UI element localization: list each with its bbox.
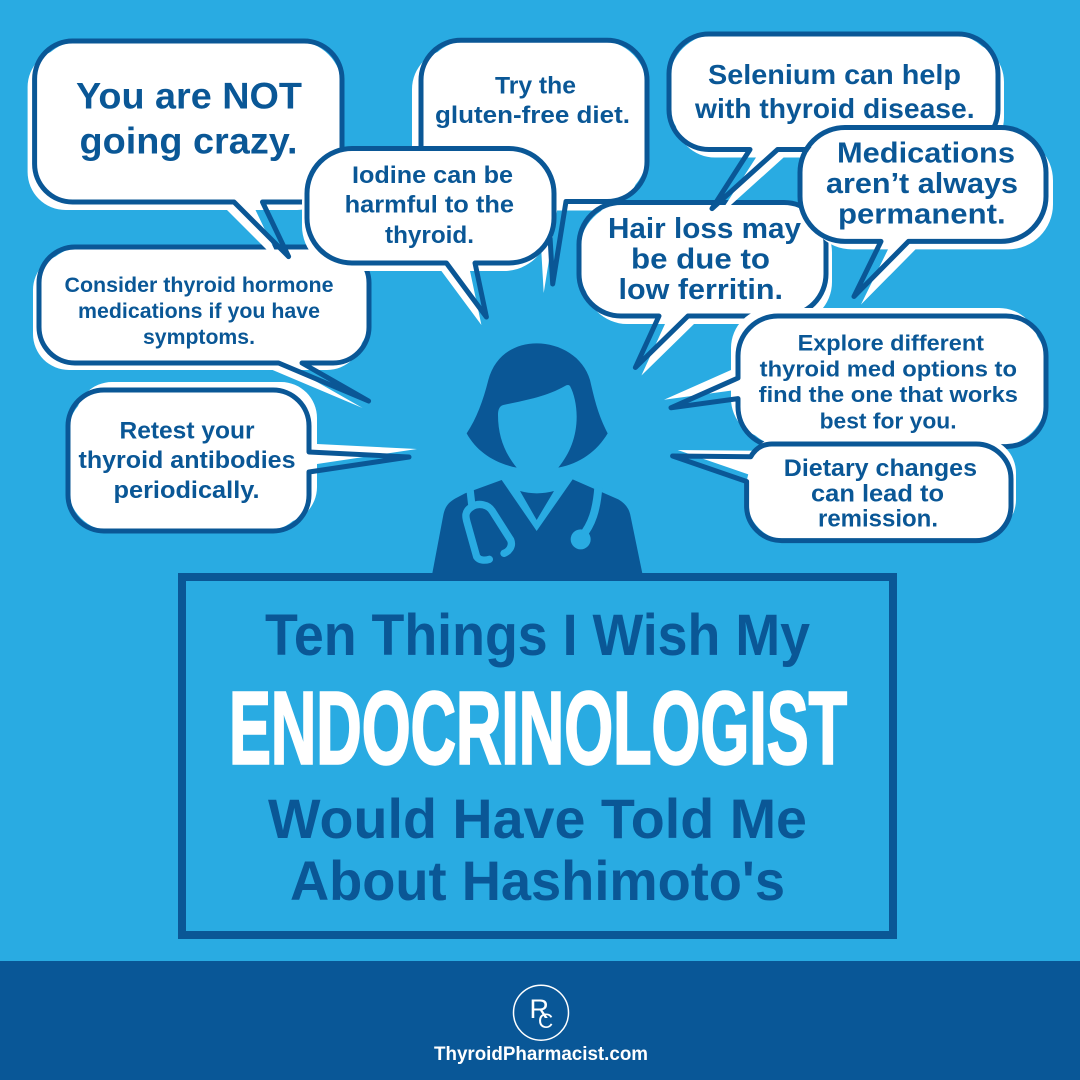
speech bubble: consider medications bbox=[33, 247, 369, 408]
speech bubble: selenium: with thyroid disease. bbox=[694, 93, 975, 124]
speech bubble: you are not going crazy: You are NOT bbox=[76, 76, 302, 116]
speech bubble: iodine: Iodine can be bbox=[352, 162, 513, 189]
speech bubble: selenium: Selenium can help bbox=[708, 59, 961, 90]
speech bubble: gluten-free diet bbox=[412, 40, 647, 293]
icon: RC logo: R bbox=[530, 994, 549, 1024]
website address: ThyroidPharmacist.com bbox=[434, 1044, 648, 1065]
title line: About Hashimoto's: About Hashimoto's bbox=[290, 849, 785, 912]
speech bubble: iodine bbox=[302, 148, 554, 325]
speech bubble: hair loss: low ferritin. bbox=[618, 274, 783, 306]
icon: RC logo: C bbox=[538, 1010, 553, 1033]
icon: doctor with stethoscope bbox=[432, 343, 643, 575]
speech bubble: medications: permanent. bbox=[838, 198, 1006, 230]
speech bubble: explore med options: find the one that works bbox=[759, 382, 1018, 407]
speech bubble: consider medications: symptoms. bbox=[143, 325, 255, 349]
speech bubble: explore med options: thyroid med options to bbox=[760, 357, 1017, 382]
speech bubble: retest antibodies: Retest your bbox=[120, 418, 254, 444]
speech bubble: iodine: harmful to the bbox=[345, 192, 514, 219]
speech bubble: medications bbox=[800, 128, 1053, 304]
speech bubble: iodine: thyroid. bbox=[385, 222, 474, 249]
title line: Ten Things I Wish My: Ten Things I Wish My bbox=[265, 603, 810, 668]
speech bubble: you are not going crazy bbox=[28, 41, 342, 265]
speech bubble: medications: Medications bbox=[837, 138, 1015, 170]
speech bubble: explore med options: best for you. bbox=[820, 408, 957, 433]
speech bubble: dietary changes: remission. bbox=[818, 505, 938, 532]
speech bubble: retest antibodies: periodically. bbox=[114, 477, 260, 504]
speech bubble: dietary changes bbox=[673, 438, 1016, 541]
speech bubble: dietary changes: Dietary changes bbox=[784, 455, 977, 482]
footer band bbox=[0, 961, 1080, 1080]
title line: Would Have Told Me: Would Have Told Me bbox=[268, 787, 807, 850]
speech bubble: selenium bbox=[669, 34, 1004, 217]
speech bubble: consider medications: medications if you have bbox=[78, 299, 320, 323]
speech bubble: you are not going crazy: going crazy. bbox=[80, 120, 298, 162]
speech bubble: retest antibodies: thyroid antibodies bbox=[78, 447, 296, 474]
speech bubble: hair loss: Hair loss may bbox=[608, 213, 801, 245]
speech bubble: gluten-free diet: gluten-free diet. bbox=[435, 102, 630, 129]
speech bubble: gluten-free diet: Try the bbox=[495, 73, 576, 100]
speech bubble: retest antibodies bbox=[68, 382, 417, 531]
title panel bbox=[182, 577, 893, 935]
speech bubble: dietary changes: can lead to bbox=[811, 481, 944, 508]
speech bubble: medications: aren’t always bbox=[826, 168, 1018, 200]
speech bubble: hair loss: be due to bbox=[631, 244, 770, 276]
icon: RC logo bbox=[514, 985, 568, 1040]
speech bubble: explore med options bbox=[664, 308, 1046, 447]
speech bubble: explore med options: Explore different bbox=[798, 331, 985, 356]
speech bubble: consider medications: Consider thyroid hormone bbox=[64, 273, 334, 297]
speech bubble: hair loss bbox=[579, 202, 832, 376]
